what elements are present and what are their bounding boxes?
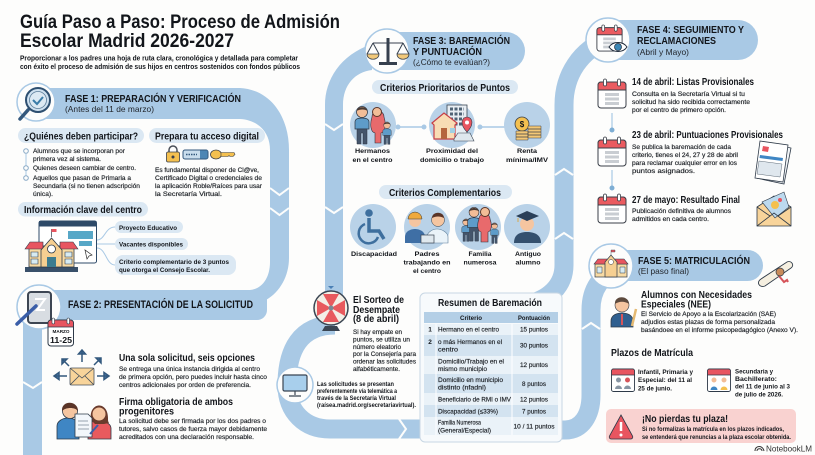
icon: calendar marzo [48,318,74,346]
icon: document table [755,141,791,184]
item: antiguo alumno: Antiguo [515,251,541,258]
text: secundaria bachillerato: del 11 de junio al 3 [735,384,790,390]
text: una sola solicitud: de primera opción, pero puedes incluir hasta cinco [119,374,267,381]
icon: diploma [758,262,793,286]
table rows: 7 puntos [522,408,547,416]
callout: vacantes [115,238,188,250]
text: listas provisionales: solicitud ha sido recibida correctamente [632,99,750,106]
text: necesidades especiales: adjudios estas plazas de forma personalizada [641,319,775,326]
list: participants: única). [33,191,53,198]
table rows: 12 puntos [520,362,549,369]
heading: fase 4: (Abril y Mayo) [637,47,689,57]
text: listas provisionales [632,77,754,114]
callout: proyecto educativo: Proyecto Educativo [119,225,177,232]
panel: fase 1 [17,83,265,275]
heading: fase 5: (El paso final) [638,266,689,276]
heading: fase 3: FASE 3: BAREMACIÓN [413,34,510,47]
list: participants: Secundaria (si no tienen adscripción [33,183,140,190]
callout: no pierdas tu plaza: Si no formalizas la matrícula en los plazos indicados, [642,427,784,433]
text: sorteo de desempate: por la Consejería para [353,351,416,358]
text: listas provisionales: por el centro de primero opción. [632,107,726,114]
table rows: 12 puntos [520,396,549,404]
item: padres trabajando: el centro [413,268,441,275]
text: firma obligatoria: tutores, salvo casos de fuerza mayor debidamente [119,426,267,433]
icon: warning triangle [609,415,633,439]
table rows: centro [438,346,458,354]
item: proximidad [420,102,484,164]
text: secundaria bachillerato: Bachillerato: [735,376,777,383]
panel: fase 3 [350,29,550,275]
connectors [97,227,115,265]
text: acceso digital: la aplicación Roble/Raíces para usar [155,183,263,190]
item: renta minima [504,102,550,164]
item: familia numerosa [455,204,501,266]
icon: open envelope [757,192,791,226]
icon: calendar marzo: MARZO [52,329,70,334]
heading: fase 3: (¿Cómo te evalúan?) [413,57,490,67]
text: una sola solicitud: Se entrega una única instancia dirigida al centro [119,366,260,373]
text: listas provisionales: Consulta en la Secretaría Virtual si tu [632,91,745,98]
item: hermanos en el centro: en el centro [352,157,393,164]
icon: school [589,244,633,288]
text: necesidades especiales: El Servicio de Apoyo a la Escolarización (SAE) [641,311,776,318]
item: discapacidad: Discapacidad [351,251,397,258]
icon: calendar with eye [586,18,630,62]
item: proximidad: Proximidad del [426,148,478,155]
heading: fase 1: FASE 1: PREPARACIÓN Y VERIFICACIÓN [65,92,241,105]
heading: fase 5: FASE 5: MATRICULACIÓN [638,254,750,267]
text: sorteo de desempate: número eleatorio [353,344,401,351]
table rows [424,312,558,435]
table rows: o más Hermanos en el [438,339,502,346]
callout: criterio complementario: que otorga el Consejo Escolar. [119,267,210,274]
icon: student with pencil [611,297,636,327]
heading: quienes deben participar: ¿Quiénes deben participar? [24,132,138,142]
item: proximidad: domicilio o trabajo [420,157,484,164]
heading: fase 4: FASE 4: SEGUIMIENTO Y [637,25,744,36]
heading: fase 2: FASE 2: PRESENTACIÓN DE LA SOLICITUD [68,298,253,311]
heading: fase 4 [637,25,744,57]
text: necesidades especiales: basándoee en el informe psicopedagógico (Anexo V). [641,327,798,334]
item: familia numerosa: numerosa [464,260,497,266]
heading: informacion clave: Información clave del centro [24,205,142,216]
heading: fase 1: (Antes del 11 de marzo) [65,104,154,114]
text: firma obligatoria: Firma obligatoria de ambos [119,397,233,408]
table rows: Domicilio/Trabajo en el [438,358,504,366]
item: antiguo alumno [504,204,550,266]
text: firma obligatoria: acreditados con una declaración responsable. [119,434,254,441]
text: secundaria bachillerato [735,368,790,398]
text: necesidades especiales: Especiales (NEE) [641,300,711,310]
icon: envelope with arrows [54,350,109,385]
text: sorteo de desempate [353,295,417,373]
heading: fase 1 [65,92,241,114]
subtitle [20,54,300,71]
logo: notebooklm: NotebookLM [766,444,812,454]
text: resultado final: admitidos en cada centro. [632,216,709,223]
text: necesidades especiales: Alumnos con Necesidades [641,290,752,301]
list: participants [24,148,140,198]
icon: calendar marzo: 11-25 [50,335,72,345]
banner: fase 4 [600,20,758,60]
icon: calendar 23 abril [598,137,626,166]
panel: fase 2 [17,285,267,441]
table rows: Criterio [460,315,482,322]
text: infantil primaria [638,369,693,392]
subtitle: Proporcionar a los padres una hoja de ruta clara, cronológica y detallada para completar [20,54,298,62]
icon: parents signing [57,403,111,439]
heading: fase 4: RECLAMACIONES [637,36,716,47]
icon: calendar 27 mayo [598,194,626,223]
title: Guía Paso a Paso: Proceso de Admisión [20,11,340,33]
item: renta minima: mínima/IMV [506,157,549,164]
table rows: Domicilio en municipio [438,377,503,384]
text: solicitudes telematicas: (raísea.madrid.org/secretariavirtual). [317,403,416,409]
text: solicitudes telematicas [317,382,416,409]
text: infantil primaria: Especial: del 11 al [638,377,692,384]
text: sorteo de desempate: (8 de abril) [353,314,399,325]
text: sorteo de desempate: alfabéticamente. [353,366,400,373]
table rows: (General/Especial) [438,428,491,434]
heading: quienes deben participar [18,128,144,143]
text: secundaria bachillerato: de julio de 2026. [735,392,783,398]
table rows: Familia Numerosa [438,420,481,426]
text: puntuaciones provisionales: puntos asignados. [632,168,695,175]
heading: criterios prioritarios [372,80,518,94]
roadmap ribbon [23,38,620,455]
heading: prepara tu acceso digital: Prepara tu acceso digital [155,132,259,142]
callout: no pierdas tu plaza: se entenderá que renuncias a la plaza escolar obtenida. [642,435,791,441]
panel: fase 5 [589,244,798,443]
text: firma obligatoria [119,397,267,441]
list: participants: Alumnos que se incorporan por [33,148,126,155]
item: hermanos en el centro: Hermanos [355,148,390,155]
text: acceso digital: la Secretaría Virtual. [155,191,222,198]
text: secundaria bachillerato: Secundaria y [735,368,773,376]
list: participants: Quienes deseen cambiar de centro. [33,165,136,172]
heading: criterios complementarios [379,185,512,199]
text: necesidades especiales [641,290,798,334]
icon: monitor [277,367,313,403]
heading: criterios complementarios: Criterios Complementarios [389,188,501,199]
table title: Resumen de Baremación [438,298,542,309]
icon: calendar secundaria [708,369,730,392]
text: sorteo de desempate: puntos, se utiliza un [353,336,410,344]
text: puntuaciones provisionales: criterio, tienes el 24, 27 y 28 de abril [632,152,739,159]
callout: criterio complementario: Criterio complementario de 3 puntos [119,259,229,266]
text: solicitudes telematicas: Las solicitudes se presentan [317,382,394,388]
icon: magnifying glass [17,83,55,121]
table rows: mismo municipio [438,366,487,373]
icon: scales [365,29,409,73]
callout: vacantes: Vacantes disponibles [119,242,183,248]
text: puntuaciones provisionales: Se publica la baremación de cada [632,144,731,151]
table rows: Discapacidad (≤33%) [438,408,498,416]
text: sorteo de desempate: ordenar las solicitudes [353,358,417,366]
title [20,11,340,52]
heading: fase 3 [413,34,510,67]
heading: plazos de matricula: Plazos de Matrícula [611,348,693,359]
text: infantil primaria: 25 de junio. [638,386,672,392]
table rows: 15 puntos [520,326,549,334]
text: puntuaciones provisionales: para reclamar cualquier error en los [632,160,738,167]
timeline connector [610,113,614,190]
text: una sola solicitud: centros adicionales por orden de preferencia. [119,382,251,389]
heading: fase 5 [638,254,750,276]
text: puntuaciones provisionales [632,130,783,175]
text: resultado final [632,195,740,223]
text: sorteo de desempate: Desempate [353,305,400,316]
panel: fase 4 [586,18,791,226]
text: sorteo de desempate: Si hay empate en [353,329,402,336]
callout: no pierdas tu plaza: ¡No pierdas tu plaza! [642,413,728,425]
list: participants: Aquellos que pasan de Primaria a [33,175,131,182]
connectors [398,126,505,128]
text: una sola solicitud: Una sola solicitud, seis opciones [119,353,255,364]
table rows: 2 [428,339,432,346]
text: solicitudes telematicas: preferentemente vía telemática a [317,389,398,395]
text: resultado final: Publicación definitiva de alumnos [632,208,732,215]
icon: raffle wheel [314,286,348,331]
text: acceso digital: Es fundamental disponer de Cl@ve, [155,167,259,174]
icon: calendar infantil [612,369,634,392]
item: antiguo alumno: alumno [516,260,541,266]
text: acceso digital [155,167,263,198]
text: una sola solicitud [119,353,267,389]
text: solicitudes telematicas: través de la Secretaría Virtual [317,396,396,402]
list: participants: primera vez al sistema. [33,156,101,163]
subtitle: con éxito el proceso de admisión de sus hijos en centros sostenidos con fondos públicos [20,62,300,71]
icon: tablet and pen [17,285,61,329]
callout: proyecto educativo [115,221,183,233]
icon: school and browser window [25,221,96,272]
text: resultado final: 27 de mayo: Resultado Final [632,195,740,206]
heading: informacion clave [18,202,148,216]
table rows: distinto (nfadnl) [438,384,486,392]
banner: fase 5 [612,250,763,281]
title: Escolar Madrid 2026-2027 [20,30,234,52]
table rows: 30 puntos [520,342,549,350]
heading: criterios prioritarios: Criterios Prioritarios de Puntos [380,83,510,94]
icon: lock, password and key [166,146,235,162]
callout: criterio complementario [115,255,236,275]
text: acceso digital: Certificado Digital o credenciales de [155,175,262,182]
table rows: 1 [428,326,432,334]
text: firma obligatoria: progenitores [119,406,174,418]
text: firma obligatoria: La solicitud debe ser firmada por los dos padres o [119,418,266,425]
item: renta minima: Renta [517,148,537,155]
item: familia numerosa: Familia [468,251,492,258]
item: padres trabajando: Padres [414,251,440,258]
table rows: Hermano en el centro [438,326,499,334]
text: sorteo de desempate: El Sorteo de [353,295,404,306]
banner: fase 3 [380,32,525,70]
table: resumen de baremacion [420,293,562,442]
text: infantil primaria: Infantil, Primaria y [638,369,693,376]
table rows: 8 puntos [522,381,547,388]
icon: calendar 14 abril [598,79,626,108]
item: renta minima: $ [520,120,525,129]
table rows: 10 / 11 puntos [514,424,555,430]
text: listas provisionales: 14 de abril: Listas Provisionales [632,77,754,88]
callout: no pierdas tu plaza [606,409,796,443]
table rows: Pontuación [518,315,550,322]
heading: fase 3: Y PUNTUACIÓN [413,45,482,58]
heading: prepara tu acceso digital [149,128,265,143]
item: discapacidad [350,204,397,258]
item: padres trabajando: trabajando en [404,260,451,266]
table rows: Beneficiario de RMI o IMV [438,396,512,404]
item: padres trabajando [404,204,451,275]
item: hermanos en el centro [350,102,396,164]
